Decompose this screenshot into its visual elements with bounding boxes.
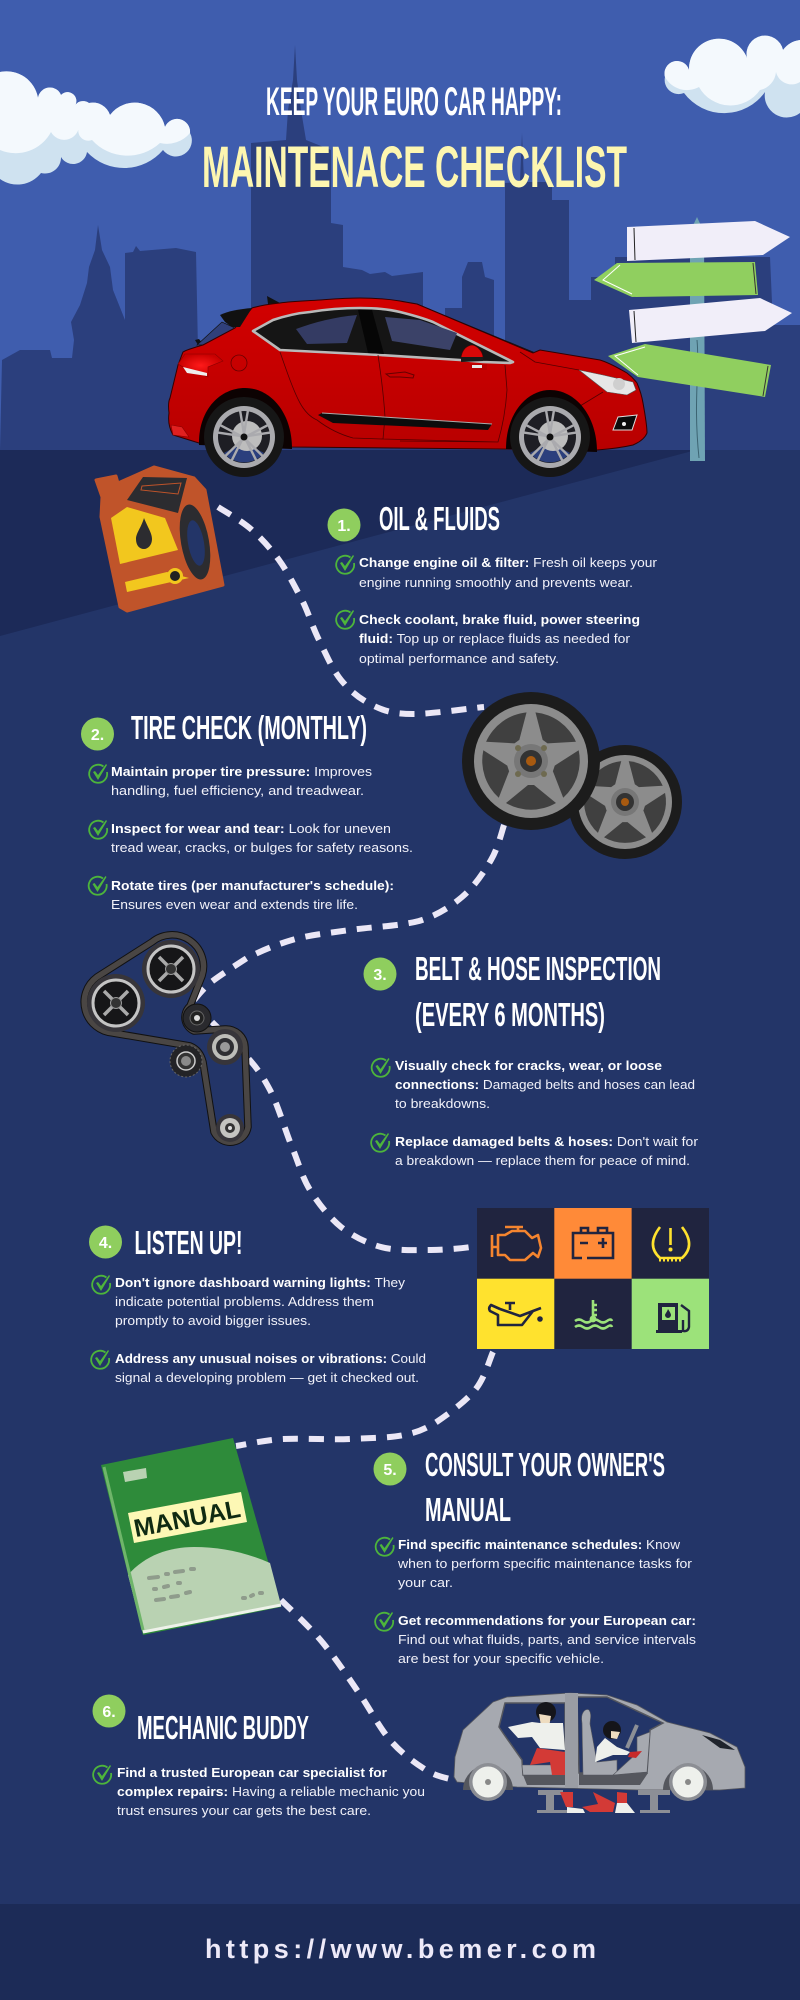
check icon bbox=[89, 764, 107, 783]
heading 2: TIRE CHECK (MONTHLY) bbox=[131, 709, 367, 746]
item text bbox=[359, 555, 658, 590]
heading 3 bbox=[415, 950, 661, 1033]
check icon bbox=[376, 1537, 394, 1556]
car windows bbox=[253, 308, 513, 363]
icon: belt and pulleys bbox=[84, 935, 248, 1142]
item text bbox=[111, 878, 394, 912]
mechanic 1 bbox=[536, 1702, 556, 1722]
item text: Address any unusual noises or vibrations: Could bbox=[115, 1351, 426, 1366]
item text: Don't ignore dashboard warning lights: They bbox=[115, 1275, 406, 1290]
item text: Get recommendations for your European car: bbox=[398, 1613, 696, 1628]
check icon bbox=[336, 610, 354, 629]
item text bbox=[395, 1058, 695, 1111]
item text: optimal performance and safety. bbox=[359, 651, 559, 666]
icon: battery bbox=[573, 1228, 613, 1258]
sign 3 bbox=[629, 298, 792, 343]
mechanic under car bbox=[560, 1792, 627, 1812]
item text: a breakdown — replace them for peace of mind. bbox=[395, 1153, 690, 1168]
item text bbox=[117, 1765, 425, 1818]
pulley F bbox=[216, 1114, 244, 1142]
check icon bbox=[375, 1612, 393, 1631]
headlight bbox=[579, 370, 636, 395]
wheel arches bbox=[199, 388, 292, 449]
section 6: mechanic buddy bbox=[92, 1694, 425, 1818]
item text bbox=[115, 1351, 426, 1385]
item text: connections: Damaged belts and hoses can lead bbox=[395, 1077, 695, 1092]
dashed route 4 bbox=[236, 1352, 493, 1446]
icon: engine bbox=[492, 1227, 541, 1260]
footer band bbox=[0, 1904, 800, 2000]
front seat bbox=[582, 1710, 617, 1775]
dashed route 2 bbox=[194, 825, 504, 1000]
section 5: owner's manual bbox=[374, 1446, 697, 1666]
check icon bbox=[89, 820, 107, 839]
item text: to breakdowns. bbox=[395, 1096, 490, 1111]
item text: engine running smoothly and prevents wear. bbox=[359, 575, 633, 590]
item text: Maintain proper tire pressure: Improves bbox=[111, 764, 373, 779]
pulley E bbox=[170, 1045, 202, 1077]
dashed route 1 bbox=[218, 507, 484, 714]
item text: Check coolant, brake fluid, power steering bbox=[359, 612, 640, 627]
fog light bbox=[613, 415, 637, 430]
icon: oil can bbox=[96, 467, 223, 611]
item text bbox=[397, 1537, 693, 1590]
item text: tread wear, cracks, or bulges for safety reasons. bbox=[111, 840, 413, 855]
jacks bbox=[537, 1790, 670, 1813]
heading 1: OIL & FLUIDS bbox=[379, 500, 500, 537]
item text bbox=[111, 821, 413, 855]
cloud: left bbox=[0, 71, 192, 185]
section 4: listen up bbox=[89, 1224, 426, 1385]
heading 3: (EVERY 6 MONTHS) bbox=[415, 996, 605, 1033]
big tire bbox=[462, 692, 600, 830]
section 3: belt and hose inspection bbox=[364, 950, 699, 1168]
item text: Rotate tires (per manufacturer's schedule): bbox=[111, 878, 394, 893]
number badge 4 bbox=[89, 1226, 122, 1258]
door seams bbox=[280, 352, 507, 442]
heading 5 bbox=[425, 1446, 665, 1528]
city skyline silhouette bbox=[0, 45, 800, 450]
signpost bbox=[594, 217, 792, 461]
rear wheel bbox=[204, 397, 284, 477]
item text bbox=[398, 1613, 697, 1666]
heading 4: LISTEN UP! bbox=[134, 1224, 242, 1261]
item text: Change engine oil & filter: Fresh oil keeps your bbox=[359, 555, 658, 570]
item text: Replace damaged belts & hoses: Don't wait for bbox=[395, 1134, 699, 1149]
small tire bbox=[568, 745, 682, 859]
number badge 3: 3. bbox=[373, 967, 387, 984]
pulley D bbox=[207, 1029, 243, 1065]
number badge 1 bbox=[328, 508, 360, 542]
icon: tire pressure bbox=[653, 1227, 689, 1260]
number badge 3 bbox=[364, 958, 396, 990]
title bbox=[202, 80, 627, 200]
dashed route 5 bbox=[281, 1600, 453, 1780]
dashed route 3 bbox=[212, 1022, 471, 1250]
red car bbox=[169, 296, 647, 477]
number badge 5: 5. bbox=[383, 1462, 397, 1479]
dashboard warning light grid bbox=[477, 1208, 709, 1349]
heading 5: MANUAL bbox=[425, 1491, 511, 1528]
pulley C bbox=[183, 1004, 211, 1032]
icon: manual book bbox=[101, 1438, 281, 1635]
manual label bbox=[128, 1492, 247, 1543]
sky background bbox=[0, 0, 800, 450]
item text: your car. bbox=[398, 1575, 453, 1590]
ground shadow bbox=[0, 450, 696, 636]
rear light bbox=[178, 354, 223, 377]
check icon bbox=[336, 555, 354, 574]
number badge 2: 2. bbox=[91, 727, 104, 744]
icon: tires bbox=[462, 692, 682, 859]
item text: when to perform specific maintenance tasks for bbox=[397, 1556, 693, 1571]
mechanic 2 bbox=[603, 1721, 621, 1739]
item text bbox=[111, 764, 373, 798]
item text: handling, fuel efficiency, and treadwear. bbox=[111, 783, 364, 798]
section 2: tire check bbox=[81, 709, 413, 912]
icon: car with mechanics bbox=[454, 1693, 745, 1813]
number badge 6 bbox=[92, 1694, 126, 1728]
pulley A bbox=[87, 974, 145, 1032]
item text: Find specific maintenance schedules: Know bbox=[398, 1537, 681, 1552]
check icon bbox=[93, 1765, 111, 1784]
number badge 6: 6. bbox=[102, 1704, 116, 1721]
sign 2 bbox=[594, 262, 758, 297]
item text: fluid: Top up or replace fluids as needed for bbox=[359, 631, 631, 646]
item text: Find out what fluids, parts, and service intervals bbox=[398, 1632, 697, 1647]
item text: trust ensures your car gets the best care. bbox=[117, 1803, 371, 1818]
item text: Visually check for cracks, wear, or loose bbox=[395, 1058, 662, 1073]
item text bbox=[359, 612, 640, 666]
check icon bbox=[372, 1058, 390, 1077]
item text: signal a developing problem — get it checked out. bbox=[115, 1370, 419, 1385]
item text: complex repairs: Having a reliable mechanic you bbox=[117, 1784, 425, 1799]
mirror bbox=[461, 345, 483, 358]
pulley B bbox=[142, 940, 200, 998]
item text: Find a trusted European car specialist for bbox=[117, 1765, 387, 1780]
item text: promptly to avoid bigger issues. bbox=[115, 1313, 311, 1328]
item text bbox=[395, 1134, 699, 1168]
check icon bbox=[89, 876, 107, 895]
check icon bbox=[92, 1275, 110, 1294]
item text: Ensures even wear and extends tire life. bbox=[111, 897, 358, 912]
icon: manual book: MANUAL bbox=[132, 1495, 243, 1543]
section 1: oil and fluids bbox=[328, 500, 658, 666]
icon: coolant bbox=[575, 1300, 612, 1328]
number badge 5 bbox=[374, 1452, 406, 1486]
footer url: https://www.bemer.com bbox=[205, 1934, 596, 1964]
item text bbox=[115, 1275, 406, 1328]
item text: indicate potential problems. Address them bbox=[115, 1294, 374, 1309]
front wheel bbox=[510, 397, 590, 477]
heading 6: MECHANIC BUDDY bbox=[137, 1709, 309, 1746]
check icon bbox=[91, 1350, 109, 1369]
number badge 4: 4. bbox=[99, 1235, 112, 1252]
door openings bbox=[499, 1703, 565, 1775]
number badge 2 bbox=[81, 718, 114, 750]
wheels bbox=[463, 1765, 713, 1790]
item text: are best for your specific vehicle. bbox=[398, 1651, 604, 1666]
icon: fuel pump bbox=[656, 1303, 689, 1333]
sign 4 bbox=[608, 344, 771, 397]
cloud: right bbox=[664, 36, 800, 117]
item text: Inspect for wear and tear: Look for uneven bbox=[111, 821, 391, 836]
sign 1 bbox=[627, 221, 790, 261]
icon: oil can warning bbox=[489, 1303, 543, 1325]
number badge 1: 1. bbox=[337, 518, 351, 535]
spoiler bbox=[220, 308, 252, 327]
side strip bbox=[318, 413, 492, 430]
check icon bbox=[371, 1133, 389, 1152]
